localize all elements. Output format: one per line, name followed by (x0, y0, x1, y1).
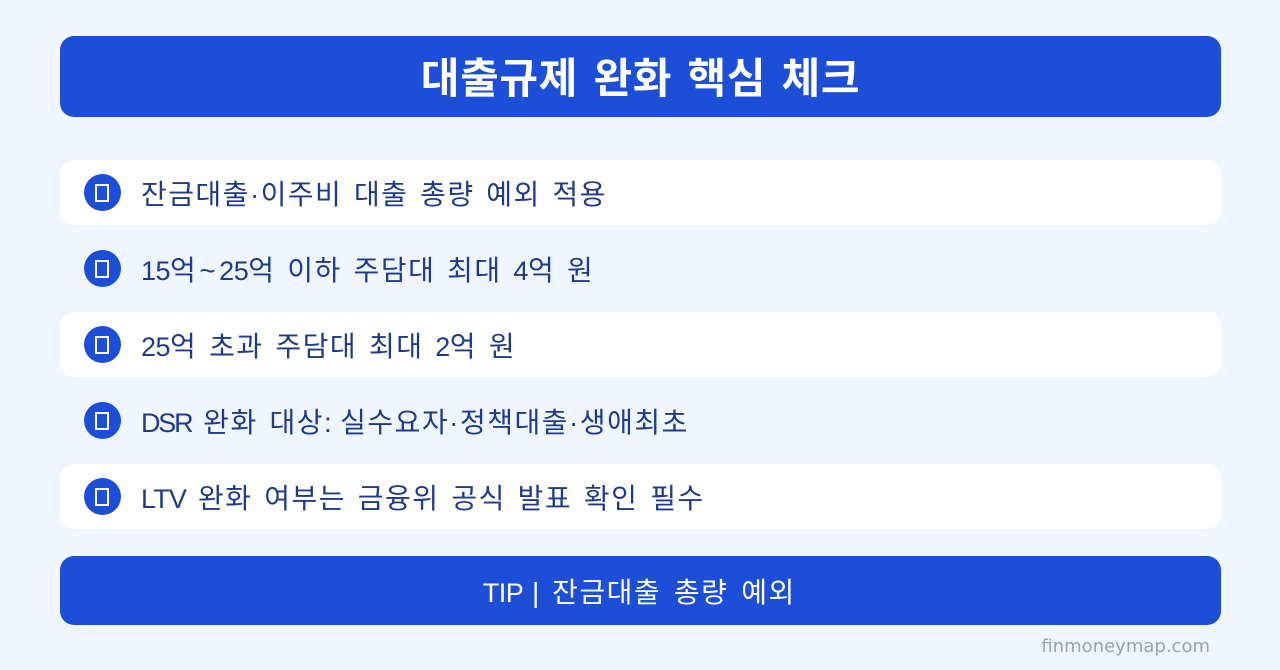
icon: missing glyph bullet 1 (84, 174, 121, 211)
item 1 text: 잔금대출·이주비 대출 총량 예외 적용 (141, 179, 607, 210)
checklist item 4 (84, 402, 689, 439)
item 2 text: 15억~25억 이하 주담대 최대 4억 원 (141, 255, 594, 286)
item 5 text: LTV 완화 여부는 금융위 공식 발표 확인 필수 (141, 483, 705, 514)
checklist item 5 (60, 464, 1221, 529)
tip banner: TIP | 잔금대출 총량 예외 (483, 577, 796, 608)
checklist item 3 (60, 312, 1221, 377)
icon: missing glyph bullet 3 (84, 326, 121, 363)
item 4 text: DSR 완화 대상: 실수요자·정책대출·생애최초 (141, 407, 689, 438)
watermark: finmoneymap.com (1041, 636, 1210, 657)
item 3 text: 25억 초과 주담대 최대 2억 원 (141, 331, 516, 362)
checklist item 2 (84, 250, 594, 287)
checklist item 1 (60, 160, 1221, 225)
title banner (60, 36, 1221, 117)
tip banner (60, 556, 1221, 625)
title banner: 대출규제 완화 핵심 체크 (421, 55, 860, 102)
icon: missing glyph bullet 4 (84, 402, 121, 439)
icon: missing glyph bullet 2 (84, 250, 121, 287)
icon: missing glyph bullet 5 (84, 478, 121, 515)
